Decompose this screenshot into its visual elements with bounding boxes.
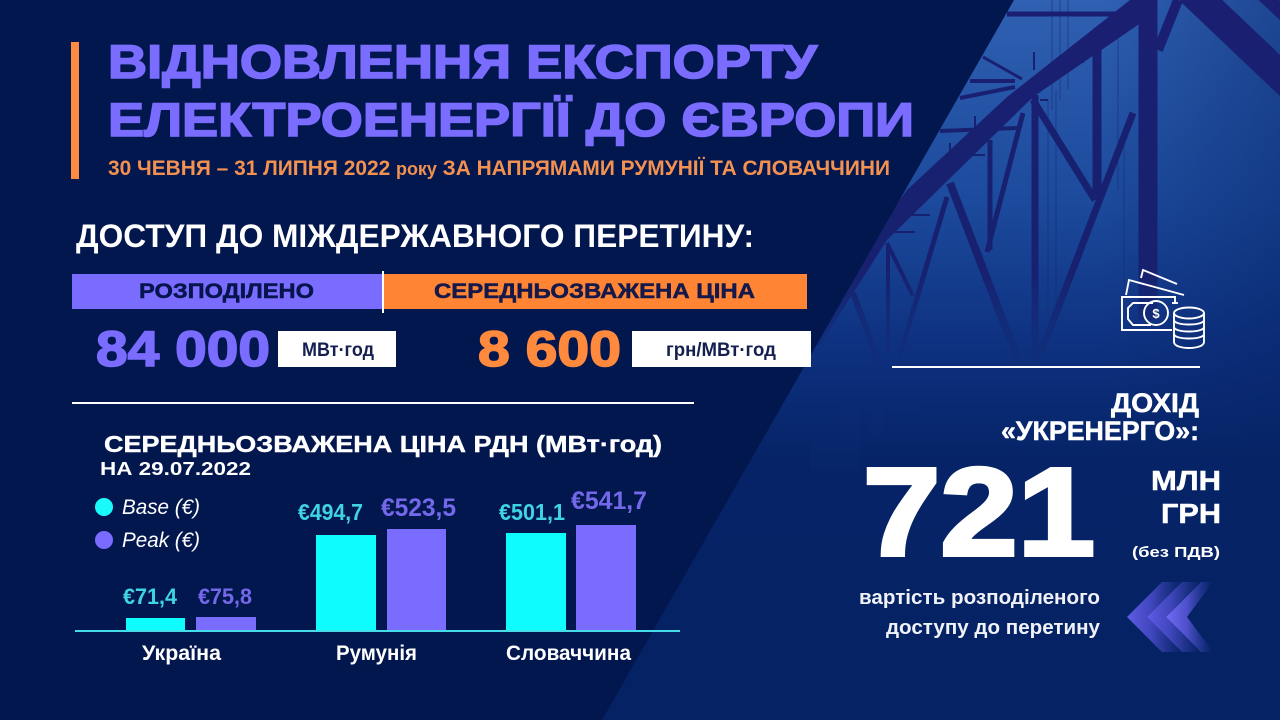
caption	[859, 587, 1101, 639]
bar chart: €541,7	[571, 487, 647, 515]
icon: money and coins: $	[1152, 306, 1160, 321]
divider between allocated and price	[382, 271, 384, 313]
big number: МЛН	[1151, 465, 1221, 496]
panel: weighted average price	[384, 274, 811, 377]
bar chart: €494,7	[298, 499, 363, 525]
bar chart: Румунія	[336, 642, 417, 665]
legend: Peak (€)	[122, 529, 200, 552]
chart title: СЕРЕДНЬОЗВАЖЕНА ЦІНА РДН (МВт·год)	[104, 431, 662, 457]
caption: вартість розподіленого	[859, 587, 1100, 609]
panel: allocated: 84 000	[96, 321, 270, 377]
big number	[863, 443, 1221, 582]
big number: (без ПДВ)	[1132, 544, 1220, 561]
dark left panel	[0, 0, 1014, 720]
legend	[95, 496, 200, 552]
bar chart: €75,8	[198, 584, 252, 609]
panel: weighted average price: СЕРЕДНЬОЗВАЖЕНА ЦІНА	[434, 280, 755, 303]
income label: ДОХІД	[1111, 388, 1199, 418]
legend: Base (€)	[122, 496, 200, 519]
bar chart: Словаччина	[506, 642, 631, 665]
bar chart: €501,1	[499, 499, 565, 525]
panel: allocated	[72, 274, 396, 377]
bar chart: €523,5	[381, 494, 456, 522]
panel: allocated: МВт·год	[302, 340, 374, 361]
chart title	[100, 431, 662, 479]
caption: доступу до перетину	[886, 617, 1101, 639]
panel: weighted average price: грн/МВт·год	[666, 340, 776, 361]
big number: ГРН	[1161, 498, 1221, 529]
bar chart: Україна	[142, 642, 221, 665]
big number: 721	[863, 443, 1095, 582]
income label: «УКРЕНЕРГО»:	[1001, 416, 1199, 446]
panel: allocated: РОЗПОДІЛЕНО	[139, 280, 314, 303]
title block: ВІДНОВЛЕННЯ ЕКСПОРТУ	[108, 35, 818, 88]
chart title: НА 29.07.2022	[100, 459, 251, 479]
income label	[1001, 388, 1199, 446]
icon: chevrons	[1127, 582, 1213, 652]
title block: ЕЛЕКТРОЕНЕРГІЇ ДО ЄВРОПИ	[108, 93, 914, 146]
heading: access to interstate crossing: ДОСТУП ДО МІЖДЕРЖАВНОГО ПЕРЕТИНУ:	[76, 218, 754, 254]
bar chart	[75, 487, 680, 665]
bar chart: €71,4	[123, 584, 178, 609]
title block: 30 ЧЕВНЯ – 31 ЛИПНЯ 2022 року ЗА НАПРЯМАМИ РУМУНІЇ ТА СЛОВАЧЧИНИ	[108, 157, 890, 180]
icon: money and coins	[1122, 270, 1204, 348]
title block	[71, 35, 914, 180]
panel: weighted average price: 8 600	[478, 321, 621, 377]
